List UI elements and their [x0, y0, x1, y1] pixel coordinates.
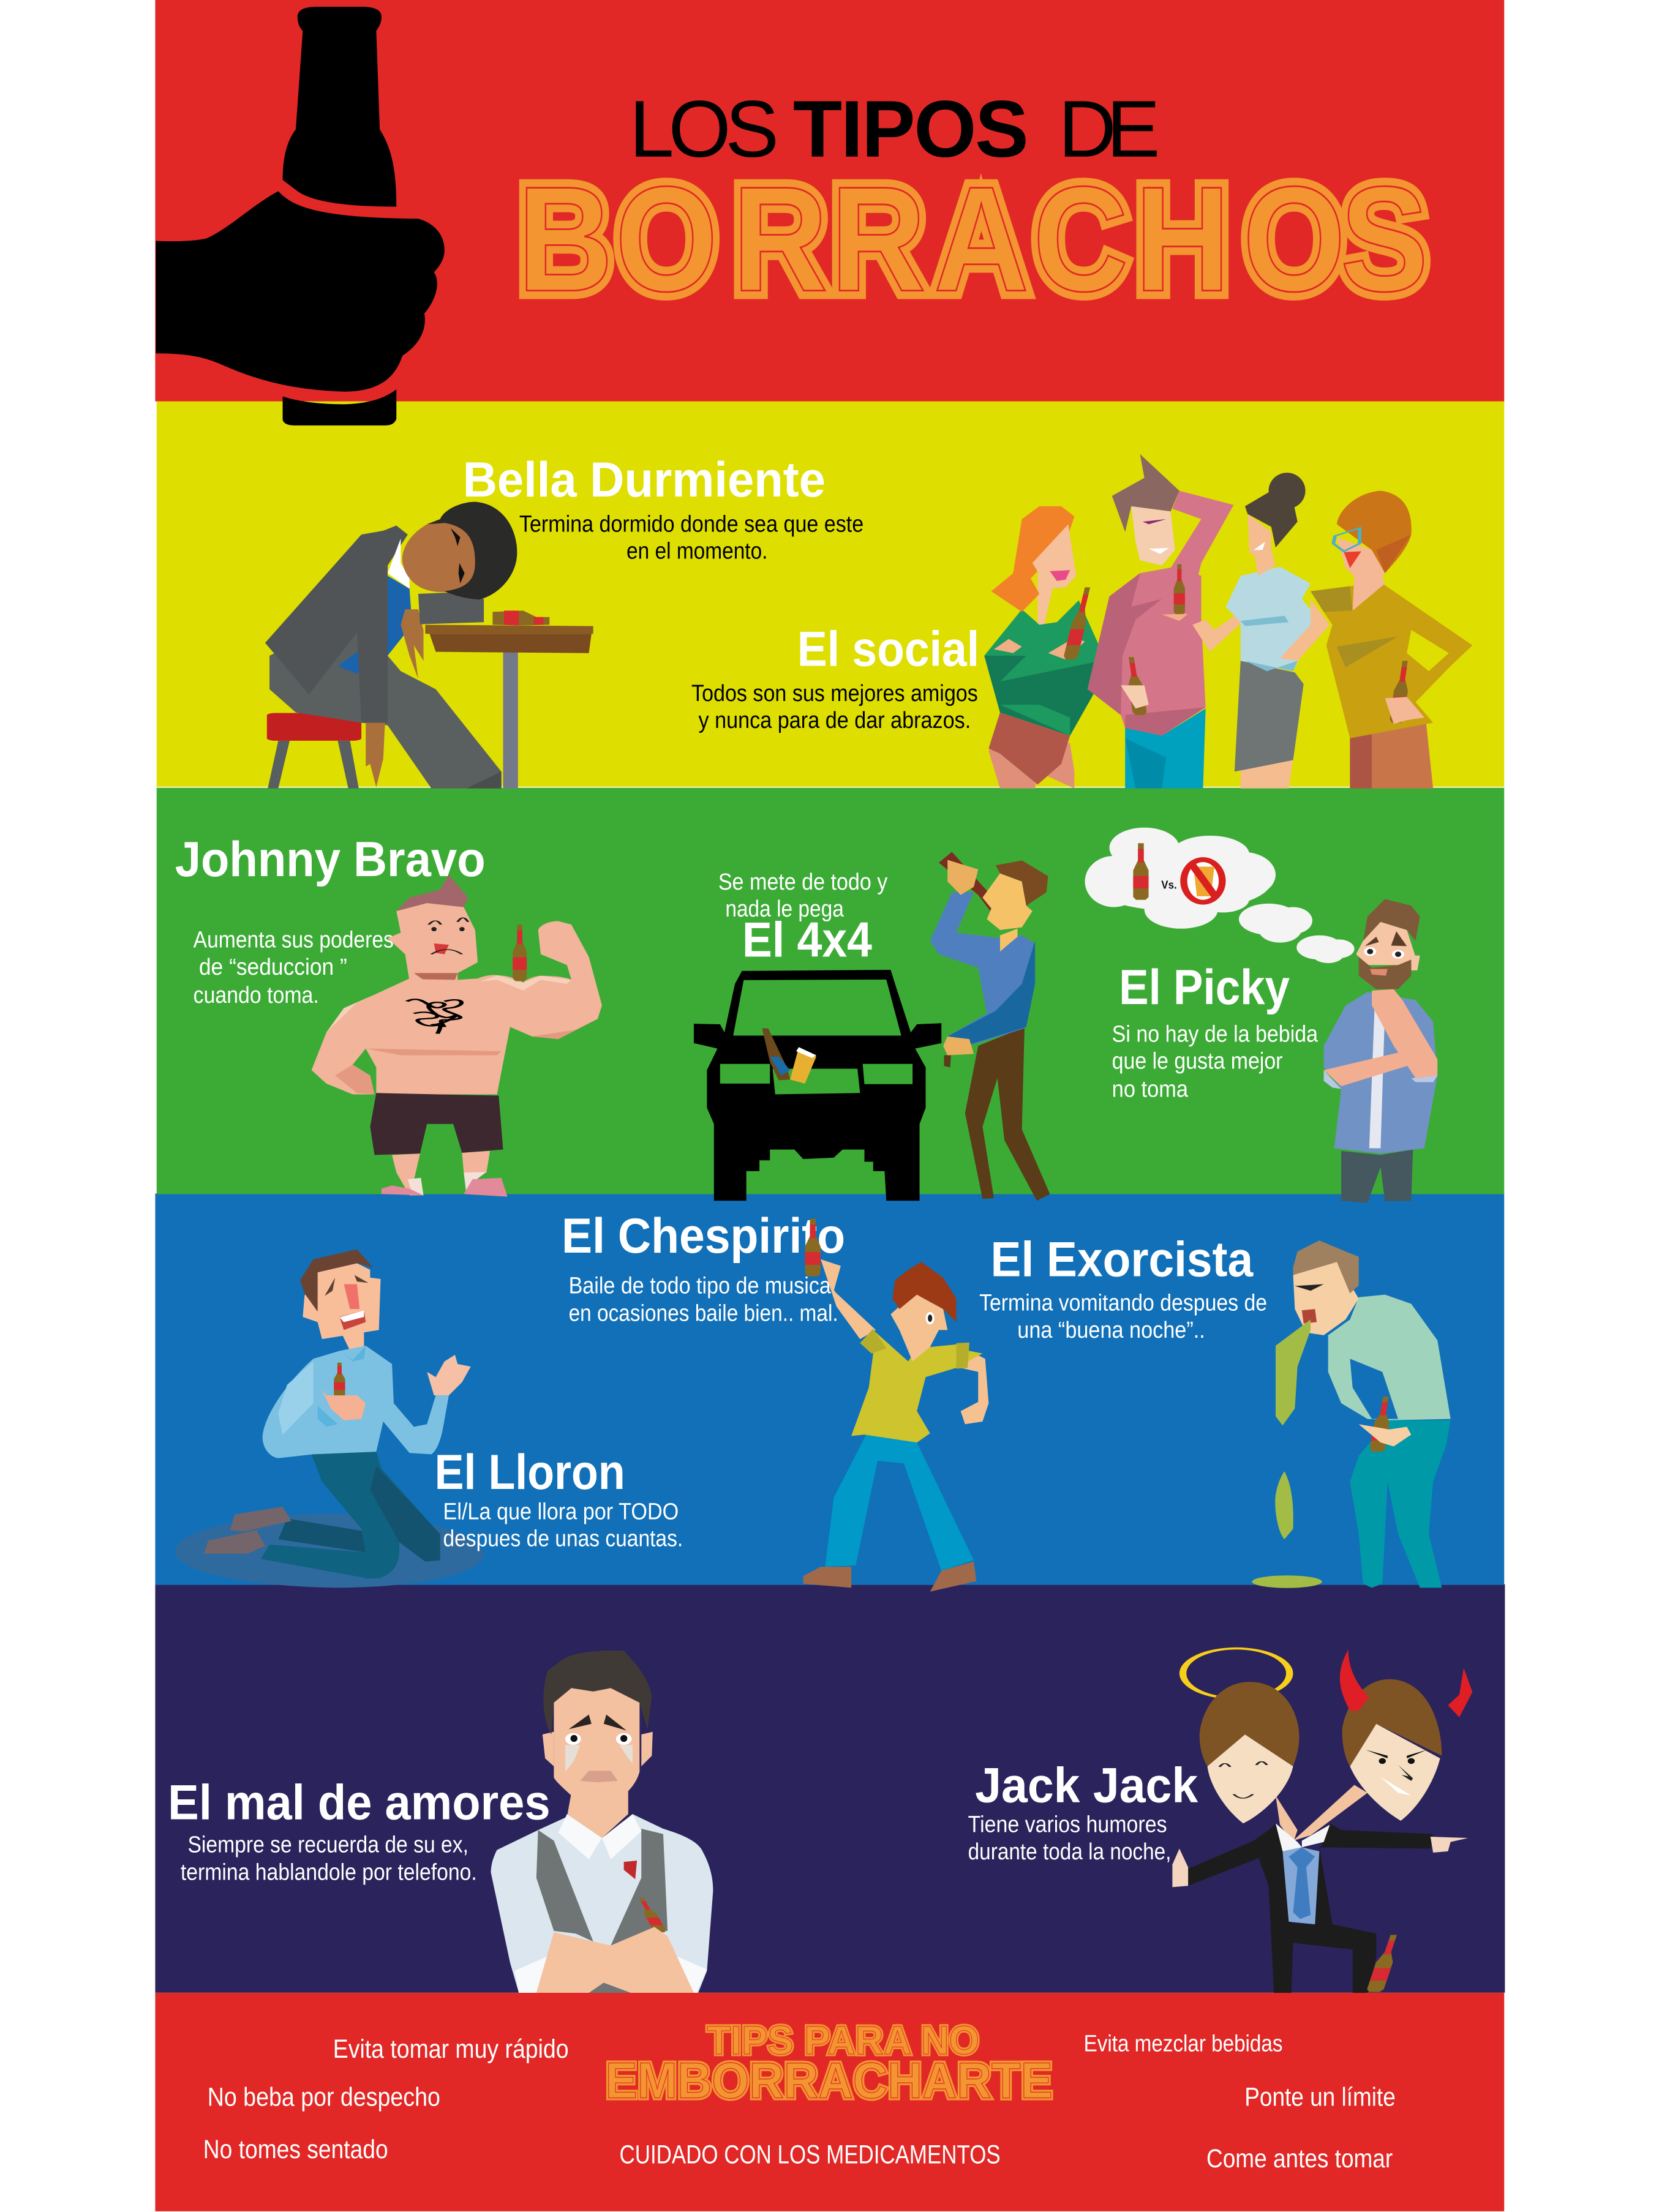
tip: CUIDADO CON LOS MEDICAMENTOS [620, 2140, 1001, 2169]
text: el chespirito: Baile de todo tipo de musica, [569, 1273, 837, 1299]
panel: mal de amores and jack jack [155, 1584, 1505, 1993]
character: vomiting man [1252, 1240, 1451, 1588]
text: jack jack: Tiene varios humores [968, 1812, 1167, 1837]
panel: bella durmiente and el social [157, 402, 1504, 789]
title: los tipos de: LOS [630, 84, 775, 174]
woman with hair bun [1192, 473, 1330, 789]
character: sad man crossed arms [491, 1651, 713, 1993]
text: el exorcista [979, 1290, 1267, 1343]
heading: el picky: El Picky [1119, 960, 1290, 1015]
heading: el social: El social [797, 622, 979, 677]
text: johnny bravo [194, 928, 394, 1008]
character: jack jack two heads [1172, 1648, 1472, 1993]
tip: No beba por despecho [208, 2082, 440, 2112]
character: bearded man thinking [1324, 899, 1437, 1203]
text: el lloron [443, 1499, 683, 1551]
text: bella durmiente [519, 512, 863, 564]
text: el chespirito [569, 1273, 838, 1326]
character: man asleep on table [265, 502, 593, 789]
text: jack jack: durante toda la noche, [968, 1839, 1171, 1865]
text: el social: y nunca para de dar abrazos. [699, 708, 971, 733]
character: crying man kneeling [175, 1250, 484, 1588]
title: borrachos: BORRACHOS [518, 156, 1428, 323]
tip: Evita mezclar bebidas [1084, 2031, 1282, 2056]
text: el mal de amores: Siempre se recuerda de su ex, [187, 1832, 468, 1858]
character: dancing man [803, 1219, 988, 1592]
character: man drinking from bottle [930, 852, 1050, 1201]
heading: bella durmiente: Bella Durmiente [463, 452, 826, 508]
heading: tips para no emborracharte: TIPS PARA NO [707, 2018, 979, 2063]
text: bella durmiente: en el momento. [626, 538, 767, 564]
text: el picky [1112, 1022, 1319, 1103]
heading: tips para no emborracharte [605, 2018, 1053, 2109]
tip: Come antes tomar [1206, 2144, 1393, 2173]
panel: johnny bravo, 4x4, picky [157, 788, 1504, 1203]
text: johnny bravo: cuando toma. [194, 983, 319, 1008]
label: vs: Vs. [1161, 879, 1177, 891]
text: johnny bravo: de “seduccion ” [199, 954, 347, 980]
heading: el exorcista: El Exorcista [991, 1232, 1254, 1288]
icon: bottle lying on table [492, 610, 549, 625]
icon: hand holding bottle [156, 7, 445, 426]
icon: thought cloud bottle vs glass [1085, 828, 1355, 963]
text: el 4x4 [718, 869, 887, 922]
title: los tipos de: DE [1058, 84, 1157, 174]
text: el mal de amores: termina hablandole por telefono. [181, 1860, 477, 1886]
man in pink shirt [1088, 454, 1233, 789]
heading: tips para no emborracharte: EMBORRACHARTE [605, 2052, 1053, 2109]
heading: tips para no emborracharte: EMBORRACHARTE [605, 2052, 1053, 2109]
heading: el mal de amores: El mal de amores [168, 1775, 551, 1831]
icon: halo [1179, 1648, 1293, 1700]
title: los tipos de: TIPOS [793, 84, 1027, 174]
panel: main title header [155, 0, 1504, 426]
tip: No tomes sentado [203, 2135, 388, 2164]
woman in green top [984, 506, 1102, 789]
heading: el 4x4: El 4x4 [742, 912, 872, 967]
icon: black car silhouette [694, 970, 941, 1201]
panel: chespirito, exorcista, lloron [155, 1193, 1504, 1592]
text: el chespirito: en ocasiones baile bien.. mal. [569, 1300, 838, 1326]
text: el lloron: El/La que llora por TODO [443, 1499, 679, 1525]
vomit [1252, 1319, 1322, 1588]
text: el picky: que le gusta mejor [1112, 1049, 1283, 1074]
text: el exorcista: Termina vomitando despues de [979, 1290, 1267, 1316]
text: el 4x4: nada le pega [725, 896, 845, 922]
text: johnny bravo: Aumenta sus poderes [194, 928, 394, 953]
tip: Evita tomar muy rápido [333, 2034, 569, 2064]
text: jack jack [968, 1812, 1171, 1865]
text: el picky: Si no hay de la bebida [1112, 1022, 1319, 1048]
character: johnny bravo muscle man [312, 875, 602, 1197]
text: el mal de amores [181, 1832, 477, 1886]
heading: johnny bravo: Johnny Bravo [175, 832, 486, 887]
woman with glasses [1311, 491, 1472, 789]
heading: jack jack: Jack Jack [975, 1758, 1198, 1813]
text: el lloron: despues de unas cuantas. [443, 1526, 683, 1551]
text: el 4x4: Se mete de todo y [718, 869, 887, 895]
text: el picky: no toma [1112, 1077, 1189, 1103]
text: bella durmiente: Termina dormido donde sea que este [519, 512, 863, 538]
tattoo [407, 999, 462, 1033]
text: el exorcista: una “buena noche”.. [1017, 1318, 1205, 1343]
panel: tips para no emborracharte [155, 1993, 1504, 2211]
heading: el chespirito: El Chespirito [562, 1209, 845, 1264]
text: el social: Todos son sus mejores amigos [691, 681, 978, 707]
title: borrachos: BORRACHOS [518, 156, 1428, 323]
heading: el lloron: El Lloron [435, 1445, 625, 1500]
tip: Ponte un límite [1244, 2082, 1396, 2112]
text: el social [691, 681, 978, 733]
heading: tips para no emborracharte: TIPS PARA NO [707, 2018, 979, 2063]
characters: four friends with bottles [984, 454, 1472, 789]
